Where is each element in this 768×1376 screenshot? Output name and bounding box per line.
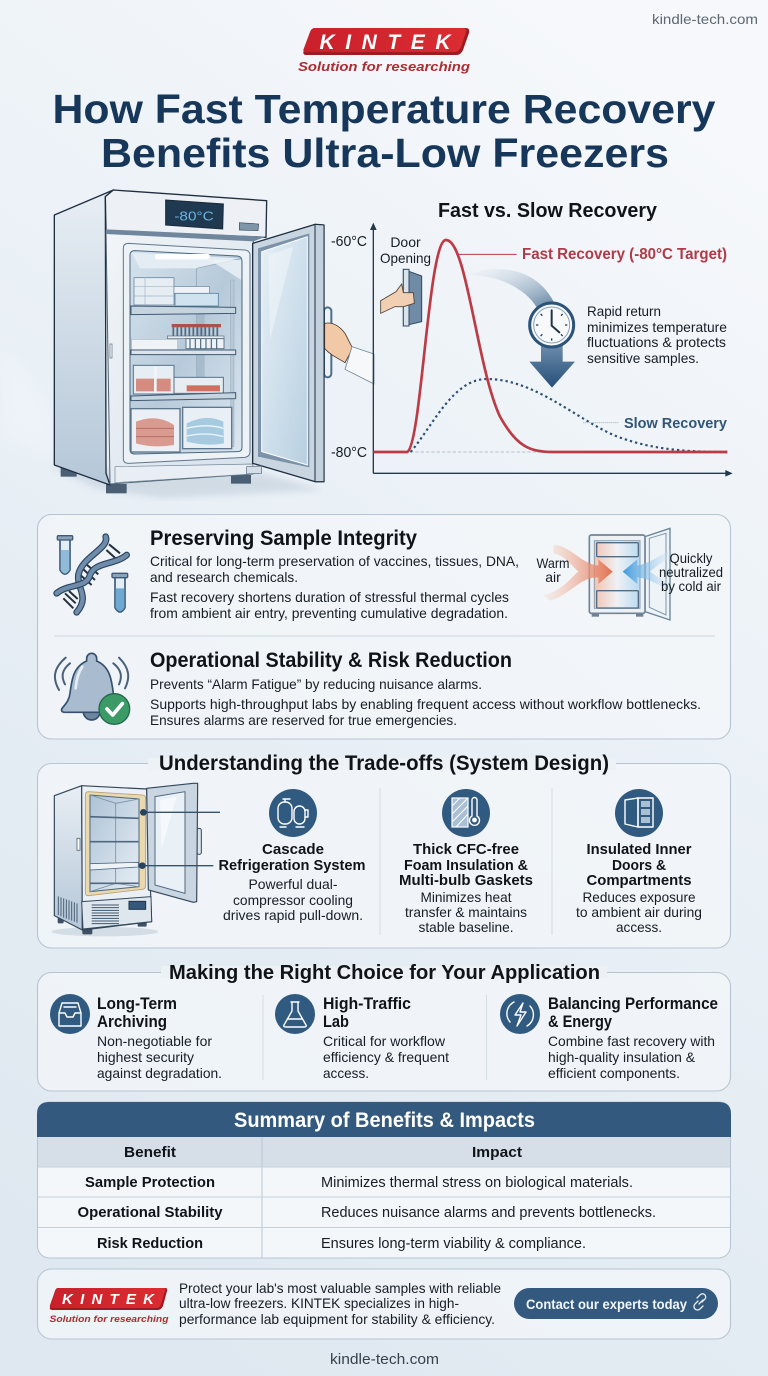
panel: understanding the trade-offs bbox=[38, 752, 730, 948]
column headers: Impact bbox=[472, 1144, 522, 1161]
slow recovery label: Slow Recovery bbox=[624, 416, 727, 432]
item: insulated inner doors: Reduces exposure bbox=[582, 889, 696, 905]
text block: ultra-low freezers. KINTEK specializes in high- bbox=[179, 1295, 459, 1311]
illustration: ultra-low freezer with open door bbox=[50, 190, 374, 498]
table title: Summary of Benefits & Impacts bbox=[234, 1109, 535, 1132]
item: balancing performance and energy bbox=[500, 994, 718, 1081]
text block: Prevents “Alarm Fatigue” by reducing nuisance alarms. bbox=[150, 676, 482, 692]
text block: Fast recovery shortens duration of stressful thermal cycles bbox=[150, 589, 509, 605]
text block: Critical for long-term preservation of vaccines, tissues, DNA, bbox=[150, 553, 519, 569]
icon: archive tray bbox=[50, 994, 90, 1034]
item: long-term archiving bbox=[50, 994, 222, 1081]
door bbox=[324, 307, 331, 377]
heading: Preserving Sample Integrity bbox=[150, 527, 417, 550]
row: risk reduction: Ensures long-term viability & compliance. bbox=[321, 1236, 586, 1252]
title: Benefits Ultra-Low Freezers bbox=[101, 130, 669, 176]
website label top: kindle-tech.com bbox=[652, 11, 758, 27]
item: high-traffic lab: access. bbox=[323, 1065, 369, 1081]
fast recovery label: Fast Recovery (-80°C Target) bbox=[522, 246, 727, 263]
callout: rapid return: minimizes temperature bbox=[587, 319, 727, 335]
title: How Fast Temperature Recovery bbox=[52, 86, 716, 132]
table: summary of benefits and impacts bbox=[37, 1102, 731, 1258]
row: operational stability: Reduces nuisance alarms and prevents bottlenecks. bbox=[321, 1205, 656, 1221]
heading: Making the Right Choice for Your Application bbox=[169, 961, 600, 984]
item: long-term archiving: Archiving bbox=[97, 1012, 167, 1031]
icon: flask bbox=[275, 994, 315, 1034]
text block: Supports high-throughput labs by enabling frequent access without workflow bottlenecks. bbox=[150, 696, 701, 712]
item: cascade refrigeration system: Cascade bbox=[262, 841, 324, 858]
callout: rapid return: Rapid return bbox=[587, 303, 661, 319]
logo: KINTEK small bbox=[50, 1288, 169, 1324]
item: insulated inner doors: access. bbox=[616, 919, 662, 935]
panel: call to action bbox=[38, 1269, 730, 1339]
button: contact bbox=[514, 1288, 718, 1319]
item: insulated inner doors: to ambient air during bbox=[576, 904, 702, 920]
item: balancing performance and energy: & Energy bbox=[548, 1012, 613, 1031]
item: foam insulation and gaskets: Minimizes heat bbox=[420, 889, 512, 905]
row: sample protection: Minimizes thermal stress on biological materials. bbox=[321, 1175, 633, 1191]
icon: link bbox=[694, 1294, 706, 1310]
shelf items bbox=[134, 278, 174, 305]
item: long-term archiving: Long-Term bbox=[97, 994, 177, 1013]
row: risk reduction: Risk Reduction bbox=[97, 1235, 203, 1252]
item: foam insulation and gaskets: transfer & maintains bbox=[405, 904, 527, 920]
icon: hand on door bbox=[381, 269, 422, 326]
item: long-term archiving: highest security bbox=[97, 1049, 194, 1065]
illustration: ultra-low freezer with open door: -80°C bbox=[174, 209, 214, 224]
y axis labels bbox=[331, 234, 367, 461]
icon: warm and cold air diagram: by cold air bbox=[661, 578, 721, 594]
item: foam insulation and gaskets: Thick CFC-free bbox=[413, 841, 519, 858]
icon: compressors bbox=[269, 789, 317, 837]
item: balancing performance and energy: efficient components. bbox=[548, 1065, 680, 1081]
item: high-traffic lab: Critical for workflow bbox=[323, 1033, 446, 1049]
item: high-traffic lab bbox=[275, 994, 449, 1081]
heading: Understanding the Trade-offs (System Design) bbox=[159, 752, 609, 775]
callout: rapid return bbox=[587, 303, 727, 366]
y axis labels: -60°C bbox=[331, 234, 367, 250]
item: insulated inner doors: Compartments bbox=[586, 872, 692, 889]
icon: DNA and test tubes bbox=[57, 536, 128, 612]
item: foam insulation and gaskets: stable baseline. bbox=[418, 919, 514, 935]
row: operational stability bbox=[78, 1204, 656, 1221]
icon: bell with check bbox=[55, 653, 130, 724]
item: high-traffic lab: High-Traffic bbox=[323, 994, 411, 1013]
item: cascade refrigeration system: Powerful dual- bbox=[248, 876, 338, 892]
logo: KINTEK: KINTEK bbox=[320, 31, 452, 54]
item: insulated inner doors: Doors & bbox=[612, 857, 666, 874]
item: high-traffic lab: Lab bbox=[323, 1012, 349, 1031]
title bbox=[52, 86, 716, 176]
callout: rapid return: fluctuations & protects bbox=[587, 334, 726, 350]
text block: Ensures alarms are reserved for true emergencies. bbox=[150, 712, 457, 728]
text block: Protect your lab's most valuable samples with reliable bbox=[179, 1280, 501, 1296]
item: long-term archiving: against degradation. bbox=[97, 1065, 222, 1081]
item: insulated inner doors bbox=[576, 789, 702, 935]
icon: warm and cold air diagram: Warm bbox=[536, 555, 570, 571]
door opening label bbox=[380, 234, 431, 266]
callout: rapid return: sensitive samples. bbox=[587, 350, 699, 366]
item: balancing performance and energy: high-quality insulation & bbox=[548, 1049, 696, 1065]
logo: KINTEK bbox=[298, 28, 470, 74]
panel: making the right choice bbox=[38, 961, 730, 1091]
row: risk reduction bbox=[97, 1235, 586, 1252]
column headers bbox=[124, 1144, 522, 1161]
item: insulated inner doors: Insulated Inner bbox=[586, 841, 692, 858]
icon: warm and cold air diagram: neutralized bbox=[659, 564, 723, 580]
heading: Operational Stability & Risk Reduction bbox=[150, 649, 512, 672]
item: high-traffic lab: efficiency & frequent bbox=[323, 1049, 449, 1065]
icon: warm and cold air diagram: Quickly bbox=[670, 550, 712, 566]
icon: warm and cold air diagram: air bbox=[545, 569, 561, 585]
item: cascade refrigeration system bbox=[218, 789, 366, 923]
hand bbox=[325, 323, 353, 363]
icon: warm and cold air diagram bbox=[536, 528, 723, 620]
icon: foam and thermometer bbox=[442, 789, 490, 837]
icon: inner door bbox=[615, 789, 663, 837]
item: balancing performance and energy: Balancing Performance bbox=[548, 994, 718, 1013]
website label bottom: kindle-tech.com bbox=[330, 1352, 439, 1368]
text block bbox=[150, 676, 701, 728]
item: foam insulation and gaskets bbox=[399, 789, 533, 935]
text block: from ambient air entry, preventing cumulative degradation. bbox=[150, 605, 508, 621]
text block bbox=[179, 1280, 501, 1327]
item: foam insulation and gaskets: Multi-bulb Gaskets bbox=[399, 872, 533, 889]
item: long-term archiving: Non-negotiable for bbox=[97, 1033, 212, 1049]
text block bbox=[150, 553, 519, 621]
row: sample protection: Sample Protection bbox=[85, 1174, 215, 1191]
logo: KINTEK small: KINTEK bbox=[62, 1291, 155, 1308]
row: operational stability: Operational Stability bbox=[78, 1204, 223, 1221]
chart: fast vs slow recovery bbox=[331, 199, 733, 477]
item: cascade refrigeration system: Refrigeration System bbox=[218, 857, 366, 874]
item: balancing performance and energy: Combine fast recovery with bbox=[548, 1033, 715, 1049]
door opening label: Opening bbox=[380, 250, 431, 266]
icon: energy bolt bbox=[500, 994, 540, 1034]
button: contact: Contact our experts today bbox=[526, 1296, 687, 1312]
text block: and research chemicals. bbox=[150, 569, 298, 585]
item: cascade refrigeration system: compressor cooling bbox=[233, 892, 353, 908]
column headers: Benefit bbox=[124, 1144, 176, 1161]
text block: performance lab equipment for stability & efficiency. bbox=[179, 1311, 495, 1327]
item: foam insulation and gaskets: Foam Insulation & bbox=[404, 857, 528, 874]
panel: sample integrity and operational stability bbox=[38, 514, 730, 739]
logo: KINTEK: Solution for researching bbox=[298, 60, 470, 74]
logo: KINTEK small: Solution for researching bbox=[50, 1314, 169, 1324]
illustration: freezer cutaway bbox=[52, 783, 220, 936]
y axis labels: -80°C bbox=[331, 445, 367, 461]
chart title: Fast vs. Slow Recovery bbox=[438, 199, 658, 222]
item: cascade refrigeration system: drives rapid pull-down. bbox=[223, 907, 363, 923]
door opening label: Door bbox=[390, 234, 421, 250]
row: sample protection bbox=[85, 1174, 633, 1191]
